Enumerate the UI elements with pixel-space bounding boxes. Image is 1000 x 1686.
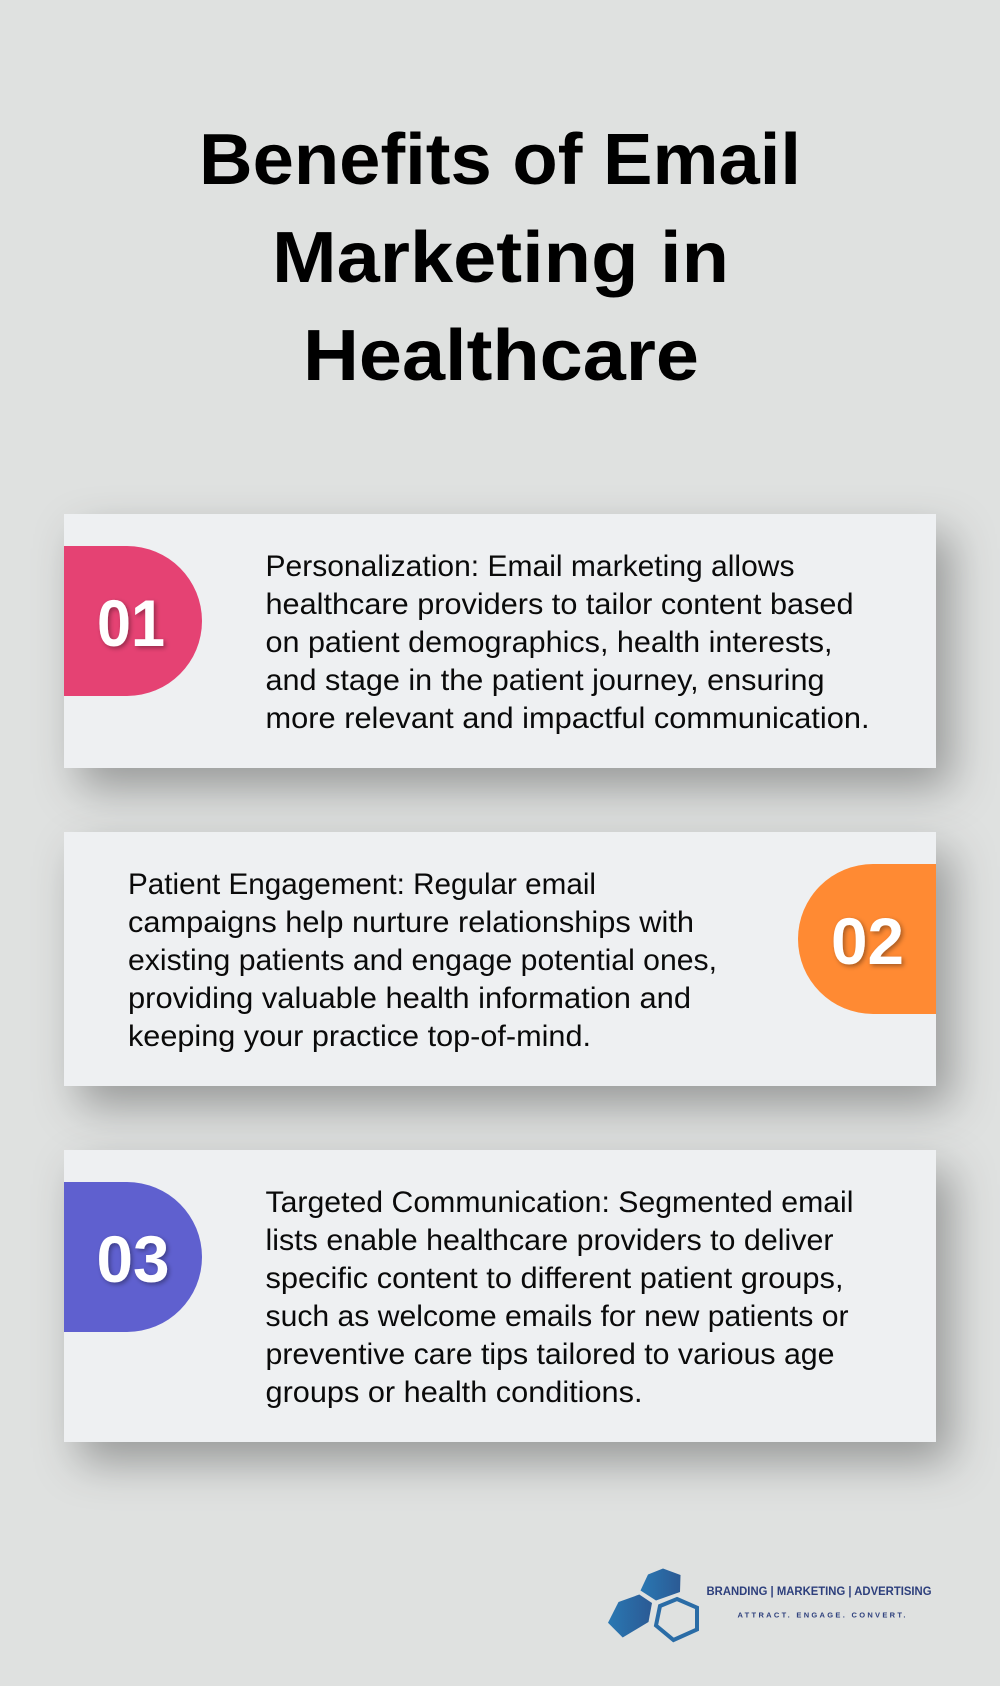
badge: 02: 02: [831, 904, 904, 978]
badge: 01: 01: [97, 586, 165, 660]
text block: patient engagement: Patient Engagement: Regular email: [128, 868, 596, 901]
title: Marketing in: [272, 218, 729, 298]
text block: targeted communication: lists enable healthcare providers to deliver: [266, 1224, 834, 1257]
title: Healthcare: [303, 316, 699, 396]
text block: personalization: and stage in the patient journey, ensuring: [266, 664, 824, 697]
badge: 03: [64, 1182, 202, 1332]
panel: card 01 personalization: [64, 514, 936, 768]
text block: targeted communication: groups or health conditions.: [266, 1376, 642, 1409]
text block: targeted communication: specific content to different patient groups,: [266, 1262, 844, 1295]
title: [199, 120, 801, 396]
text block: personalization: more relevant and impactful communication.: [266, 702, 869, 735]
text block: patient engagement: [128, 868, 717, 1053]
badge: 03: 03: [96, 1222, 170, 1296]
badge: 02: [798, 864, 936, 1014]
badge: 01: [64, 546, 202, 696]
text block: patient engagement: keeping your practice top-of-mind.: [128, 1020, 591, 1053]
text block: targeted communication: such as welcome emails for new patients or: [266, 1300, 849, 1333]
title: Benefits of Email: [199, 120, 801, 200]
icon: hexagon cluster: [608, 1568, 697, 1640]
logo tagline: services: BRANDING | MARKETING | ADVERTISING: [706, 1586, 932, 1598]
text block: patient engagement: existing patients and engage potential ones,: [128, 944, 717, 977]
logo tagline: attract engage convert: ATTRACT. ENGAGE. CONVERT.: [738, 1610, 906, 1620]
text block: personalization: on patient demographics, health interests,: [266, 626, 832, 659]
text block: personalization: [266, 550, 869, 735]
text block: personalization: Personalization: Email marketing allows: [266, 550, 794, 583]
panel: card 03 targeted communication: [64, 1150, 936, 1442]
text block: patient engagement: providing valuable health information and: [128, 982, 691, 1015]
logo: [608, 1568, 932, 1640]
text block: personalization: healthcare providers to tailor content based: [266, 588, 854, 621]
panel: card 02 patient engagement: [64, 832, 936, 1086]
text block: patient engagement: campaigns help nurture relationships with: [128, 906, 694, 939]
text block: targeted communication: preventive care tips tailored to various age: [266, 1338, 834, 1371]
text block: targeted communication: [266, 1186, 854, 1409]
text block: targeted communication: Targeted Communication: Segmented email: [266, 1186, 854, 1219]
